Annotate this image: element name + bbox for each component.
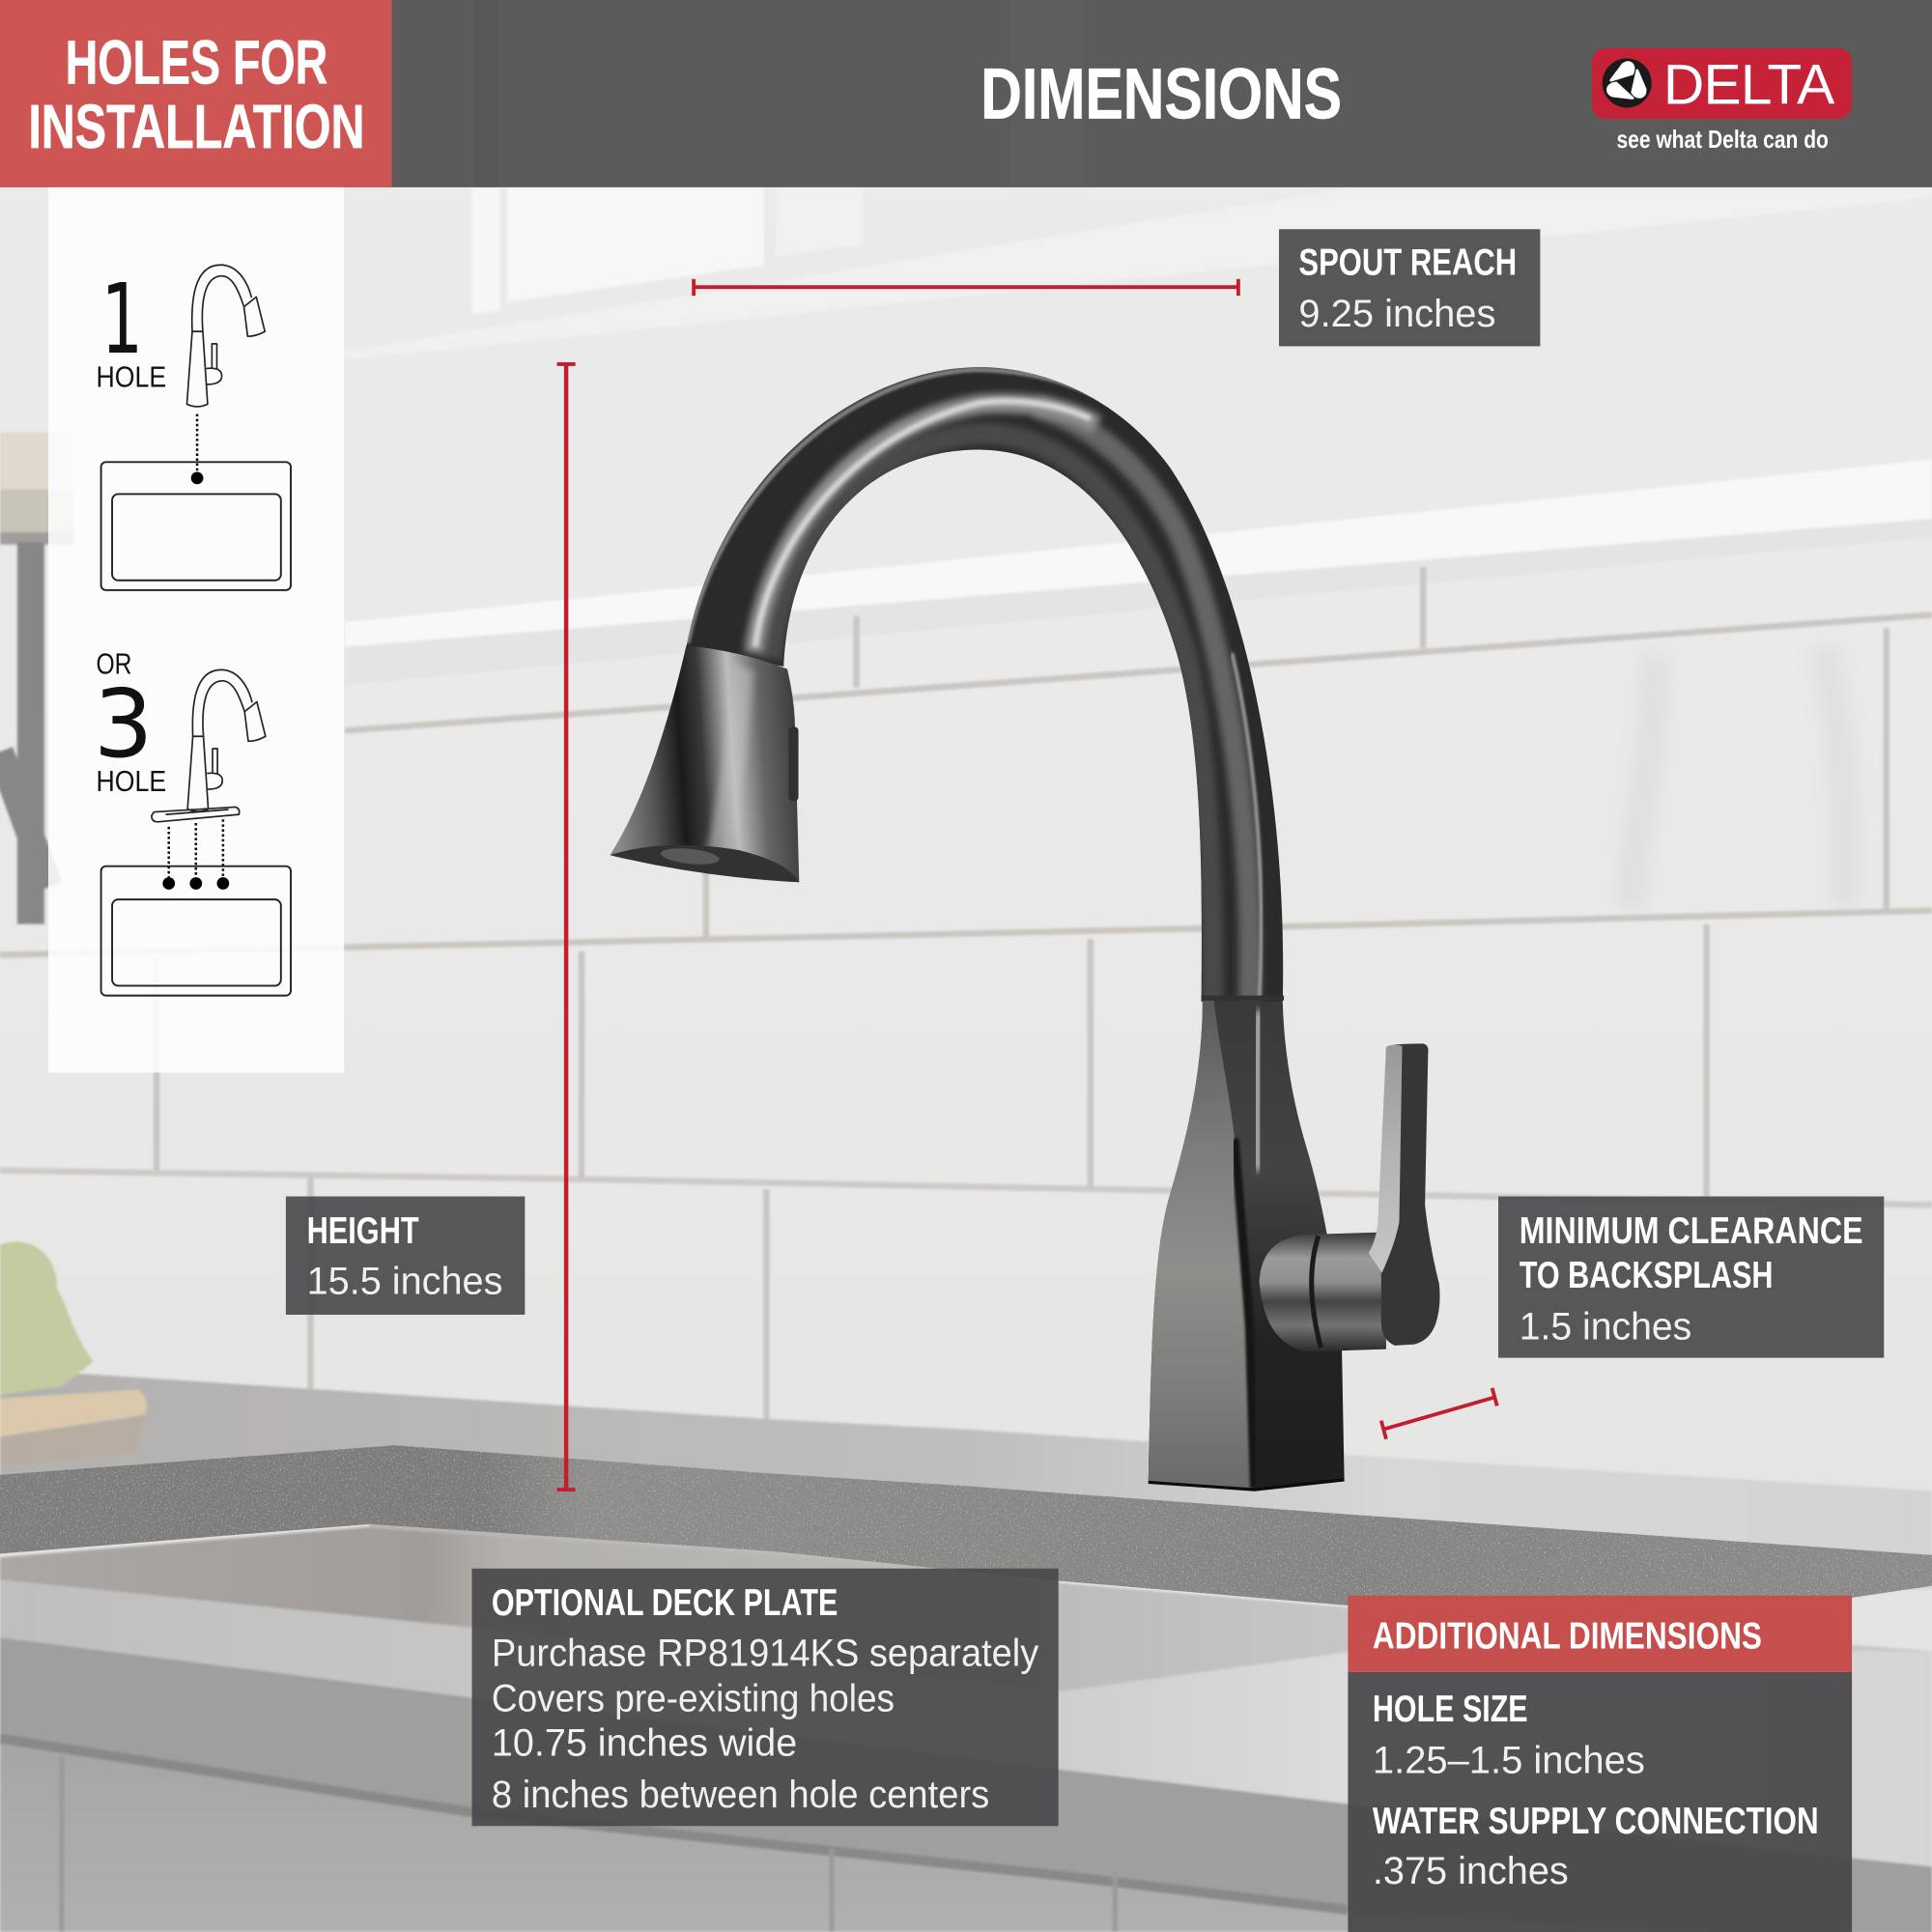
- spout tube: [686, 367, 1283, 1002]
- base body: [1149, 996, 1345, 1490]
- 3 hole option: [94, 648, 291, 996]
- heading: dimensions: DIMENSIONS: [980, 53, 1342, 133]
- 3 hole option: HOLE: [96, 765, 166, 798]
- panel: additional dimensions: 1.25–1.5 inches: [1373, 1739, 1645, 1781]
- icon: dotted line to hole: [196, 414, 198, 473]
- icon: dotted lines to holes: [169, 819, 223, 877]
- callout: height: [286, 1197, 525, 1315]
- 3 hole option: 3: [94, 669, 154, 779]
- logo: Delta: DELTA: [1663, 53, 1835, 116]
- logo: Delta: see what Delta can do: [1616, 127, 1829, 154]
- spray head: [610, 645, 799, 882]
- callout: height: HEIGHT: [307, 1210, 419, 1252]
- dimension line: height: [557, 363, 576, 1490]
- dimension line: minimum clearance: [1381, 1388, 1497, 1439]
- panel: installation hole options: [48, 187, 344, 1072]
- 1 hole option: 1: [101, 265, 143, 376]
- additional dimensions header: ADDITIONAL DIMENSIONS: [1373, 1616, 1762, 1658]
- callout: minimum clearance: 1.5 inches: [1520, 1305, 1691, 1348]
- callout: optional deck plate: Purchase RP81914KS separately: [492, 1632, 1038, 1674]
- callout: minimum clearance: [1498, 1197, 1884, 1358]
- 1 hole option: [96, 265, 291, 590]
- 3 hole option: OR: [96, 648, 131, 681]
- logo: Delta: [1592, 48, 1852, 154]
- dimension line: spout reach: [694, 279, 1238, 296]
- icon: single hole faucet: [186, 265, 265, 407]
- callout: spout reach: SPOUT REACH: [1298, 242, 1517, 283]
- panel: additional dimensions: .375 inches: [1373, 1850, 1569, 1892]
- panel: additional dimensions: HOLE SIZE: [1373, 1689, 1528, 1730]
- icon: sink with one hole: [101, 462, 291, 590]
- callout: minimum clearance: TO BACKSPLASH: [1520, 1255, 1773, 1296]
- callout: optional deck plate: [472, 1569, 1059, 1826]
- red title block: [0, 0, 392, 187]
- heading: holes for installation: INSTALLATION: [28, 92, 365, 161]
- callout: optional deck plate: OPTIONAL DECK PLATE: [492, 1582, 838, 1624]
- heading: holes for installation: HOLES FOR: [66, 28, 327, 98]
- shelf items behind panel: [0, 433, 74, 489]
- callout: optional deck plate: 8 inches between hole centers: [492, 1774, 989, 1816]
- faucet: [610, 367, 1440, 1490]
- panel: additional dimensions: WATER SUPPLY CONNECTION: [1373, 1801, 1819, 1842]
- header bar: [0, 0, 1932, 187]
- handle: [1260, 1043, 1440, 1351]
- callout: height: 15.5 inches: [307, 1260, 502, 1302]
- icon: sink with three holes: [101, 867, 291, 996]
- panel: additional dimensions: [1348, 1596, 1852, 1932]
- icon: faucet with deck plate: [152, 669, 266, 822]
- callout: spout reach: [1279, 229, 1540, 346]
- additional dimensions header: [1348, 1596, 1852, 1672]
- heading: holes for installation: [28, 28, 365, 161]
- 1 hole option: HOLE: [96, 361, 166, 394]
- callout: minimum clearance: MINIMUM CLEARANCE: [1520, 1210, 1863, 1252]
- callout: spout reach: 9.25 inches: [1298, 293, 1495, 335]
- counter: [0, 1374, 1932, 1589]
- callout: optional deck plate: Covers pre-existing holes: [492, 1678, 895, 1720]
- callout: optional deck plate: 10.75 inches wide: [492, 1722, 797, 1765]
